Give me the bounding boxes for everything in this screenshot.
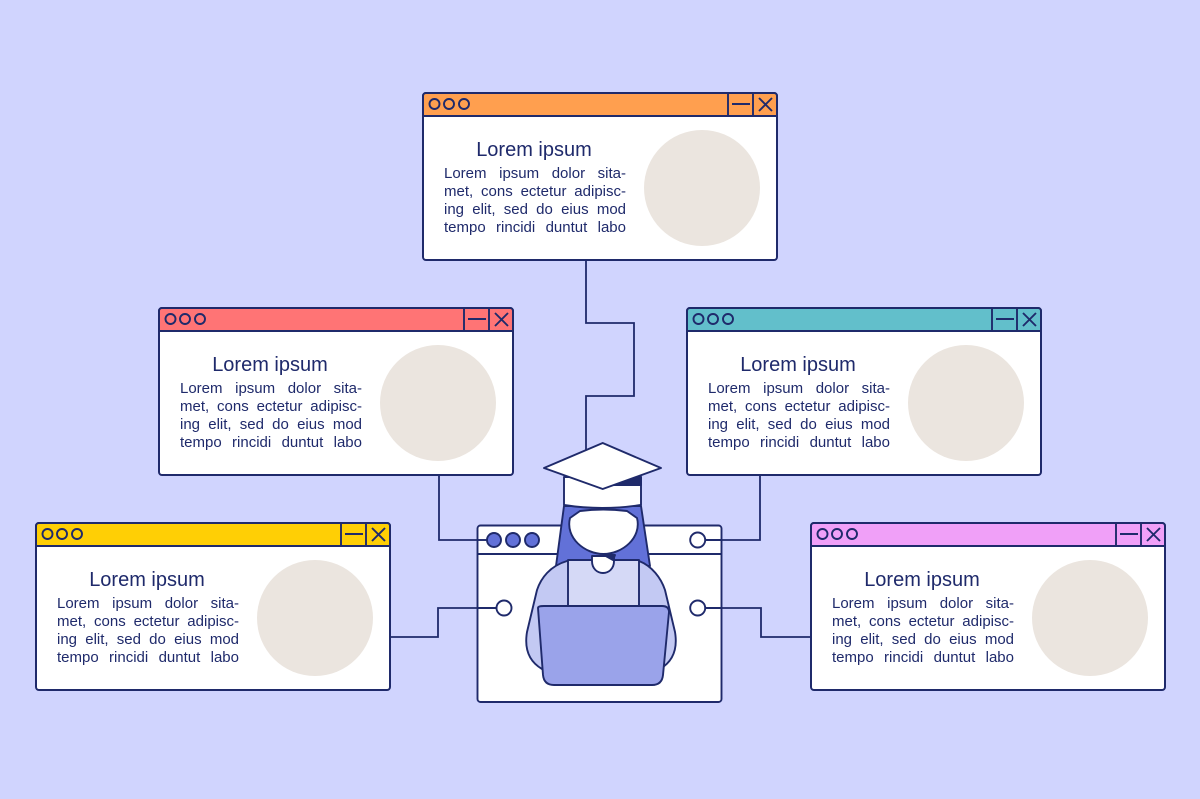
panel: teal window: tempo rincidi duntut labo xyxy=(708,434,890,450)
panel: pink window: met, cons ectetur adipisc- xyxy=(832,613,1014,630)
panel: pink window: ing elit, sed do eius mod xyxy=(832,631,1014,648)
panel: top orange window: met, cons ectetur adipisc- xyxy=(444,183,626,200)
panel: top orange window: tempo rincidi duntut labo xyxy=(444,218,626,236)
panel: red window: Lorem ipsum xyxy=(212,354,328,376)
panel: red window xyxy=(158,307,514,476)
panel: top orange window: Lorem ipsum dolor sita- xyxy=(444,165,626,182)
panel: red window: Lorem ipsum dolor sita- xyxy=(180,380,362,397)
panel: yellow window: Lorem ipsum dolor sita- xyxy=(57,595,239,612)
panel: teal window: ing elit, sed do eius mod xyxy=(708,416,890,433)
panel: pink window: tempo rincidi duntut labo xyxy=(832,648,1014,666)
panel: yellow window: Lorem ipsum xyxy=(89,569,205,591)
panel: teal window xyxy=(686,307,1042,476)
icon: graduation cap xyxy=(544,443,661,508)
student figure xyxy=(526,506,676,685)
central browser window xyxy=(477,526,722,702)
panel: teal window: Lorem ipsum xyxy=(740,354,856,376)
panel: red window: met, cons ectetur adipisc- xyxy=(180,398,362,415)
panel: yellow window xyxy=(35,522,391,691)
panel: pink window xyxy=(810,522,1166,691)
panel: yellow window: met, cons ectetur adipisc- xyxy=(57,613,239,630)
panel: teal window: Lorem ipsum dolor sita- xyxy=(708,380,890,397)
panel: teal window: met, cons ectetur adipisc- xyxy=(708,398,890,415)
panel: pink window: Lorem ipsum dolor sita- xyxy=(832,595,1014,612)
panel: red window: ing elit, sed do eius mod xyxy=(180,416,362,433)
panel: top orange window: ing elit, sed do eius mod xyxy=(444,201,626,218)
panel: yellow window: ing elit, sed do eius mod xyxy=(57,631,239,648)
panel: pink window: Lorem ipsum xyxy=(864,569,980,591)
panel: red window: tempo rincidi duntut labo xyxy=(180,434,362,450)
panel: top orange window xyxy=(422,92,778,261)
panel: top orange window: Lorem ipsum xyxy=(476,139,592,161)
panel: yellow window: tempo rincidi duntut labo xyxy=(57,648,239,666)
